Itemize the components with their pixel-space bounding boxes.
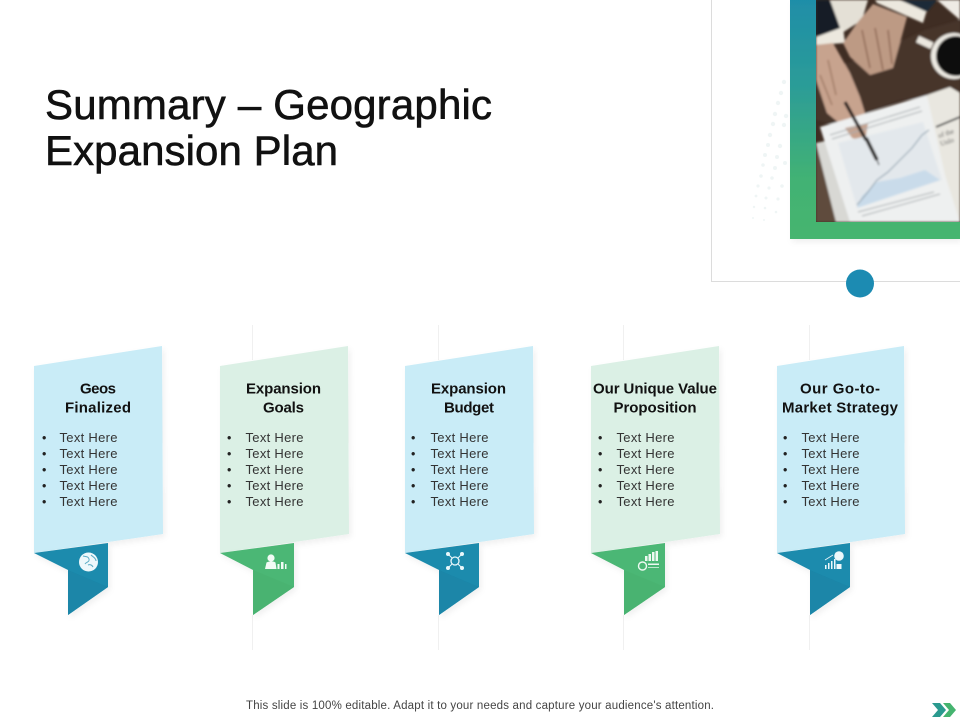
photo: hands on newspaper with coffee <box>816 0 960 222</box>
card body <box>591 346 720 553</box>
title: Expansion Plan <box>45 127 338 174</box>
bullet list: Text Here <box>246 462 304 477</box>
bullet list: Text Here <box>60 494 118 509</box>
icon: globe <box>79 552 98 572</box>
bullet list: • <box>411 495 415 509</box>
bullet list: • <box>42 479 46 493</box>
picture frame with gradient <box>790 0 960 239</box>
bullet list: Text Here <box>246 478 304 493</box>
bullet list <box>783 430 860 509</box>
heading <box>65 380 131 416</box>
bullet list: Text Here <box>802 462 860 477</box>
bullet list: • <box>227 447 231 461</box>
heading: Market Strategy <box>782 400 899 416</box>
bullet list: Text Here <box>616 494 674 509</box>
bullet list: • <box>411 463 415 477</box>
bullet list: Text Here <box>430 430 488 445</box>
accent circle <box>846 270 874 298</box>
heading: Goals <box>263 400 304 416</box>
bullet list: Text Here <box>430 446 488 461</box>
bullet list: • <box>411 479 415 493</box>
bullet list: • <box>411 431 415 445</box>
card body <box>777 346 905 553</box>
bullet list: Text Here <box>616 446 674 461</box>
heading: Finalized <box>65 400 131 416</box>
heading <box>593 380 717 416</box>
panel: Expansion Goals <box>220 346 349 615</box>
bullet list: Text Here <box>616 462 674 477</box>
bullet list: Text Here <box>616 478 674 493</box>
bullet list: • <box>598 431 602 445</box>
photo: hands on newspaper with coffee: Unlo <box>939 136 955 148</box>
connector lines <box>252 325 810 650</box>
panel: Our Unique Value Proposition <box>591 346 720 615</box>
bullet list: • <box>227 463 231 477</box>
bullet list: Text Here <box>246 446 304 461</box>
bullet list: • <box>42 463 46 477</box>
ribbon <box>220 543 294 615</box>
heading <box>431 380 506 416</box>
bullet list: Text Here <box>246 430 304 445</box>
bullet list: • <box>227 495 231 509</box>
heading: Expansion <box>246 380 321 398</box>
bullet list: Text Here <box>802 478 860 493</box>
bullet list: Text Here <box>430 478 488 493</box>
heading: Our Go-to- <box>800 380 880 398</box>
footer note: This slide is 100% editable. Adapt it to your needs and capture your audience's attention. <box>246 700 714 712</box>
card body <box>405 346 534 553</box>
bullet list: Text Here <box>60 430 118 445</box>
panel: Geos Finalized <box>34 346 163 615</box>
card body <box>220 346 349 553</box>
icon: money network <box>446 552 464 570</box>
heading: Budget <box>444 400 494 416</box>
ribbon <box>777 543 850 615</box>
heading <box>246 380 321 416</box>
heading: Proposition <box>614 400 696 416</box>
heading: Expansion <box>431 380 506 398</box>
halftone dots <box>752 80 788 221</box>
bullet list: Text Here <box>802 430 860 445</box>
bullet list: Text Here <box>246 494 304 509</box>
icon: double chevron arrow <box>932 703 956 717</box>
thin outline frame <box>712 0 960 282</box>
title: Summary – Geographic <box>45 81 492 128</box>
bullet list: • <box>42 431 46 445</box>
bullet list: • <box>783 431 787 445</box>
bullet list: Text Here <box>430 494 488 509</box>
panel: Our Go-to-Market Strategy <box>777 346 905 615</box>
card body <box>34 346 163 553</box>
ribbon <box>405 543 479 615</box>
bullet list: Text Here <box>616 430 674 445</box>
heading <box>782 380 899 416</box>
bullet list: • <box>783 495 787 509</box>
bullet list: Text Here <box>60 446 118 461</box>
heading: Geos <box>80 380 116 398</box>
bullet list <box>598 430 674 509</box>
bullet list <box>411 430 488 509</box>
panel: Expansion Budget <box>405 346 534 615</box>
bullet list: • <box>42 447 46 461</box>
ribbon <box>591 543 665 615</box>
bullet list <box>227 430 304 509</box>
title <box>45 81 492 174</box>
bullet list: Text Here <box>60 478 118 493</box>
bullet list: • <box>598 447 602 461</box>
bullet list: • <box>227 431 231 445</box>
bullet list: • <box>598 495 602 509</box>
bullet list: • <box>598 479 602 493</box>
bullet list: • <box>783 447 787 461</box>
bullet list: Text Here <box>802 446 860 461</box>
icon: person with goals <box>265 554 286 569</box>
bullet list <box>42 430 118 509</box>
ribbon <box>34 543 108 615</box>
bullet list: Text Here <box>802 494 860 509</box>
icon: chart and pie <box>825 551 844 569</box>
bullet list: • <box>42 495 46 509</box>
bullet list: • <box>598 463 602 477</box>
bullet list: Text Here <box>60 462 118 477</box>
photo: hands on newspaper with coffee: of the <box>937 127 955 140</box>
bullet list: • <box>783 479 787 493</box>
bullet list: • <box>411 447 415 461</box>
bullet list: Text Here <box>430 462 488 477</box>
bullet list: • <box>783 463 787 477</box>
heading: Our Unique Value <box>593 380 717 398</box>
bullet list: • <box>227 479 231 493</box>
icon: bars and target <box>638 551 659 570</box>
